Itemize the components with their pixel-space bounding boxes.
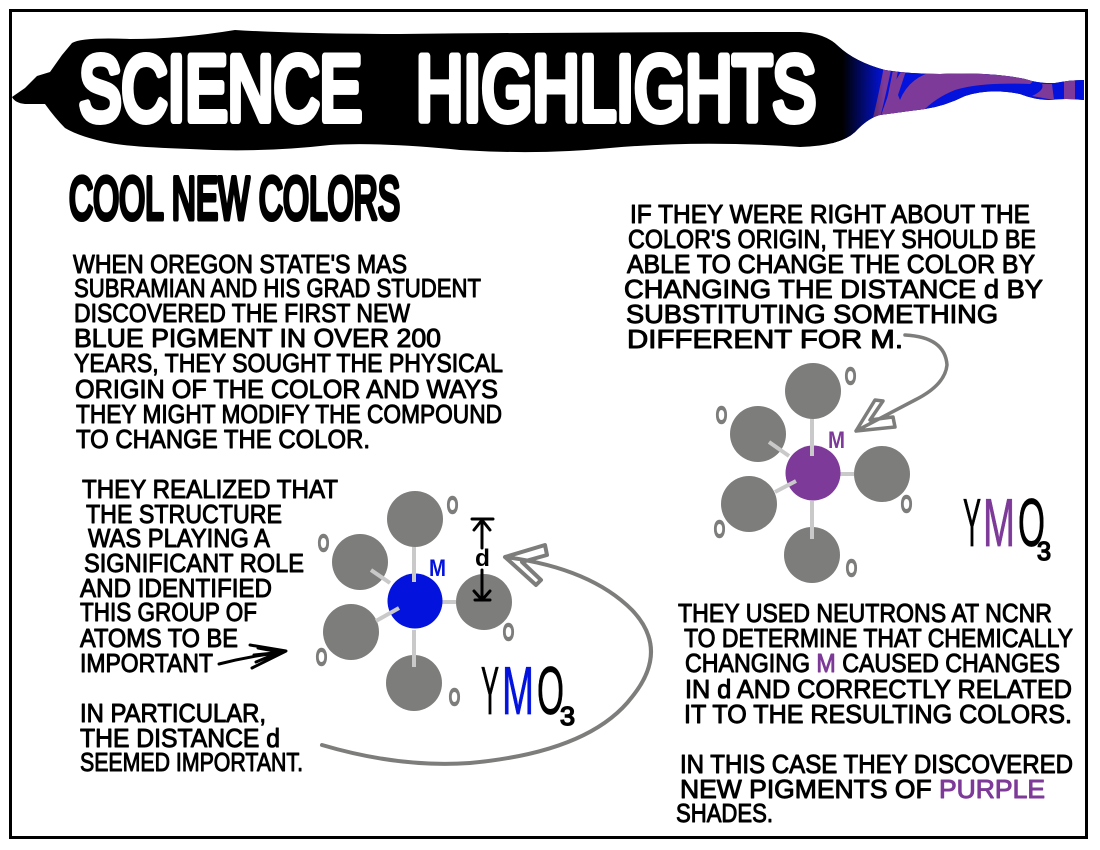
text block: intro: SUBRAMIAN AND HIS GRAD STUDENT: [74, 273, 481, 303]
oxygen labels: [714, 363, 912, 581]
oxygen labels: O: [714, 516, 725, 542]
text block: intro: WHEN OREGON STATE'S MAS: [73, 249, 407, 279]
text block: distance: SEEMED IMPORTANT.: [80, 747, 303, 777]
text block: intro: THEY MIGHT MODIFY THE COMPOUND: [76, 399, 502, 429]
text block: neutrons: IT TO THE RESULTING COLORS.: [684, 699, 1072, 729]
oxygen labels: O: [901, 491, 912, 517]
text block: neutrons: CHANGING M CAUSED CHANGES: [685, 648, 1060, 678]
oxygen labels: O: [447, 492, 458, 518]
arrow: to purple M: [856, 335, 947, 431]
text block: neutrons: [678, 598, 1073, 729]
label: M: M: [828, 427, 845, 454]
text block: conclusion: SHADES.: [676, 798, 773, 828]
molecule: blue: [316, 491, 514, 711]
text block: hypothesis: IF THEY WERE RIGHT ABOUT THE: [630, 199, 1030, 229]
banner title text: [79, 38, 816, 140]
text block: conclusion: NEW PIGMENTS OF PURPLE: [680, 774, 1045, 804]
text block: intro: DISCOVERED THE FIRST NEW: [74, 298, 410, 328]
text block: hypothesis: DIFFERENT FOR M.: [627, 324, 903, 354]
text block: intro: [73, 249, 503, 454]
oxygen labels: O: [318, 530, 329, 556]
text block: structure: IMPORTANT: [80, 648, 213, 678]
text block: distance: [80, 698, 303, 777]
formula: YMO3 blue: O: [537, 653, 564, 729]
text block: intro: BLUE PIGMENT IN OVER 200: [74, 323, 441, 353]
text block: structure: AND IDENTIFIED: [80, 573, 272, 603]
text block: structure: THIS GROUP OF: [80, 597, 257, 627]
heading: cool new colors: COOL NEW COLORS: [69, 165, 400, 232]
text block: structure: THE STRUCTURE: [86, 499, 282, 529]
text block: hypothesis: COLOR'S ORIGIN, THEY SHOULD BE: [628, 224, 1036, 254]
arrow: curved to d: [322, 545, 651, 764]
formula: YMO3 purple: M: [983, 485, 1015, 561]
banner paint swash: [12, 30, 1084, 152]
label: M: M: [429, 555, 446, 582]
text block: structure: ATOMS TO BE: [80, 623, 238, 653]
text block: intro: ORIGIN OF THE COLOR AND WAYS: [75, 374, 498, 404]
text block: intro: YEARS, THEY SOUGHT THE PHYSICAL: [74, 348, 503, 378]
oxygen labels: O: [449, 684, 460, 710]
distance marker d: d: [475, 545, 490, 572]
text block: distance: IN PARTICULAR,: [80, 698, 266, 728]
oxygen labels: O: [846, 555, 857, 581]
formula: YMO3 blue: Y: [481, 653, 499, 729]
oxygen labels: O: [316, 644, 327, 670]
oxygen labels: O: [716, 402, 727, 428]
text block: conclusion: IN THIS CASE THEY DISCOVERED: [680, 749, 1073, 779]
arrow: to atoms: [219, 645, 286, 668]
text block: structure: WAS PLAYING A: [88, 523, 271, 553]
text block: conclusion: [676, 749, 1073, 828]
text block: neutrons: IN d AND CORRECTLY RELATED: [685, 674, 1072, 704]
oxygen labels: O: [503, 619, 514, 645]
oxygen labels: O: [845, 363, 856, 389]
title banner: [12, 30, 1084, 152]
formula: YMO3 blue: M: [502, 653, 534, 729]
banner title text: SCIENCE: [79, 38, 362, 140]
text block: distance: THE DISTANCE d: [80, 723, 280, 753]
text block: structure: [80, 474, 338, 678]
distance marker d: [472, 519, 493, 600]
text block: hypothesis: CHANGING THE DISTANCE d BY: [624, 274, 1043, 304]
formula: YMO3 blue: 3: [560, 701, 575, 731]
formula: YMO3 purple: Y: [963, 485, 981, 561]
formula: YMO3 purple: 3: [1037, 536, 1051, 566]
text block: structure: SIGNIFICANT ROLE: [84, 548, 304, 578]
text block: hypothesis: [624, 199, 1043, 354]
formula: YMO3 purple: [963, 485, 1051, 566]
text block: hypothesis: SUBSTITUTING SOMETHING: [626, 299, 998, 329]
text block: hypothesis: ABLE TO CHANGE THE COLOR BY: [627, 249, 1035, 279]
oxygen labels: [316, 492, 514, 710]
text block: intro: TO CHANGE THE COLOR.: [76, 424, 370, 454]
text block: structure: THEY REALIZED THAT: [82, 474, 338, 504]
formula: YMO3 purple: O: [1018, 485, 1045, 561]
molecule: purple: [714, 363, 912, 583]
formula: YMO3 blue: [481, 653, 575, 731]
text block: neutrons: THEY USED NEUTRONS AT NCNR: [678, 598, 1052, 628]
banner title text: HIGHLIGHTS: [416, 38, 816, 140]
